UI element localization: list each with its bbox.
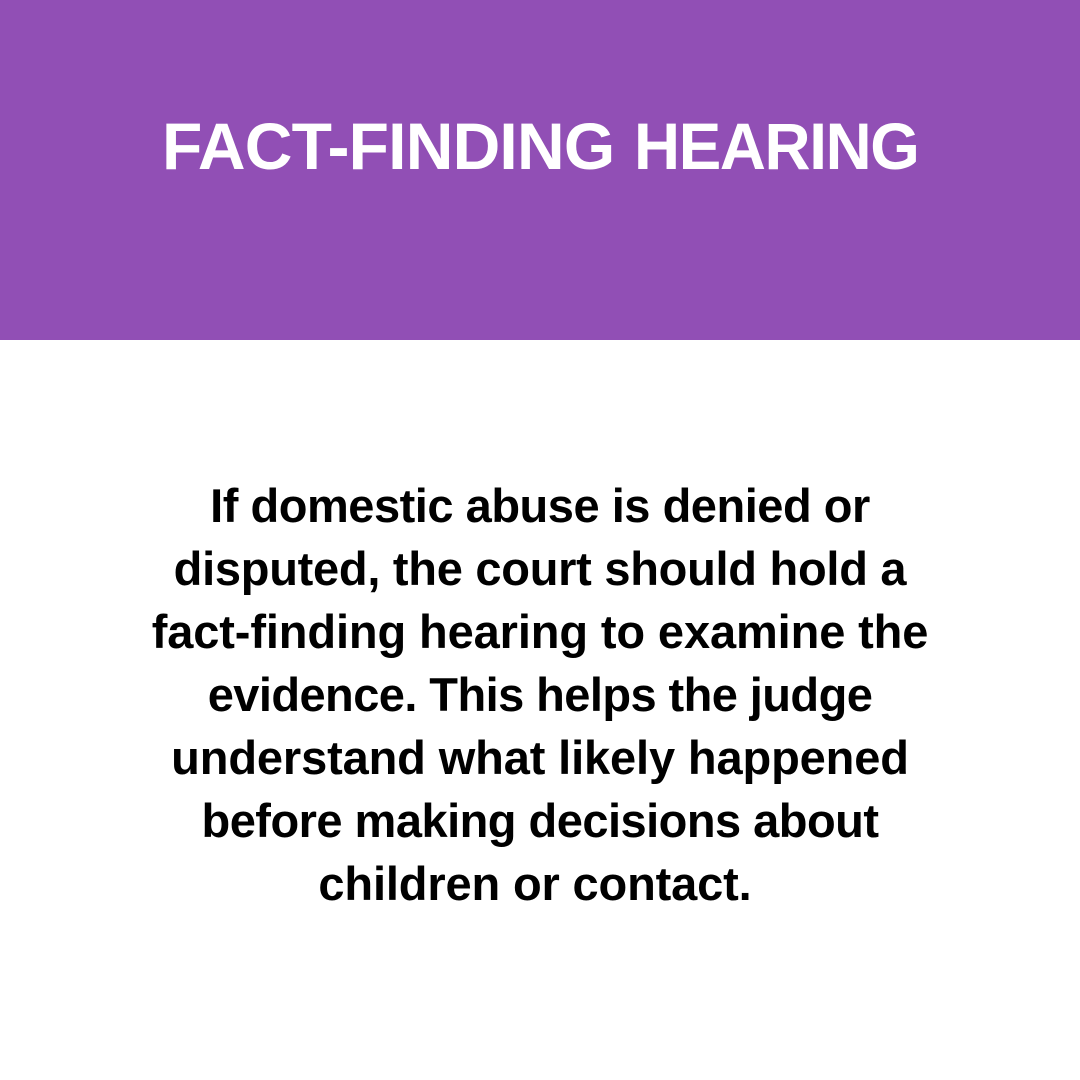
title: HEARING bbox=[634, 109, 918, 183]
text block: explanation: fact-finding hearing to examine the bbox=[152, 605, 928, 658]
text block: explanation bbox=[152, 479, 928, 910]
text block: explanation: understand what likely happened bbox=[171, 731, 909, 784]
text block: explanation: before making decisions about bbox=[202, 794, 878, 847]
text block: explanation: disputed, the court should hold a bbox=[174, 542, 906, 595]
text block: explanation: children or contact. bbox=[318, 857, 752, 910]
title bbox=[162, 109, 918, 183]
panel: purple header band bbox=[0, 0, 1080, 340]
title: FACT-FINDING bbox=[162, 109, 614, 183]
text block: explanation: If domestic abuse is denied or bbox=[210, 479, 870, 532]
text block: explanation: evidence. This helps the judge bbox=[208, 668, 872, 721]
